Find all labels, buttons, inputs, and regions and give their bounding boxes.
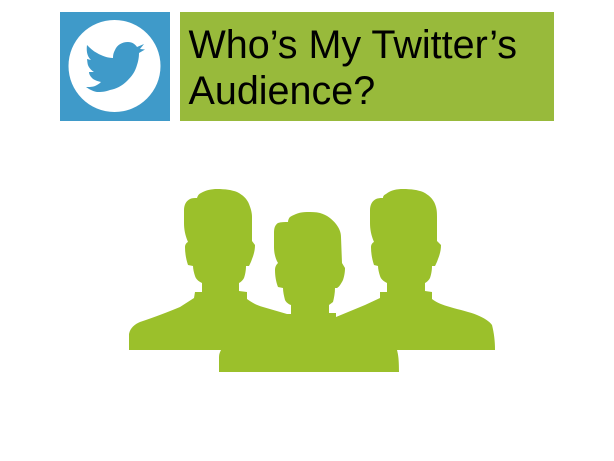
- title: [188, 23, 517, 113]
- title: Audience?: [188, 69, 375, 113]
- title: Who’s My Twitter’s: [188, 23, 517, 67]
- icon: twitter logo: [60, 12, 170, 121]
- title banner: [180, 12, 554, 121]
